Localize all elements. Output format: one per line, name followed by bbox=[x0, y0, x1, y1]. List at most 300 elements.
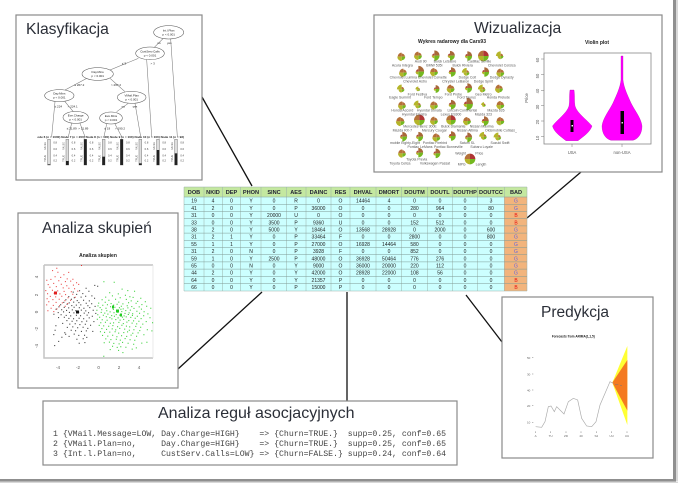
table rows: 108 bbox=[410, 271, 419, 277]
table rows: 0 bbox=[273, 285, 276, 291]
table rows: 0 bbox=[388, 285, 391, 291]
table rows: 2500 bbox=[268, 256, 280, 262]
table rows: 41 bbox=[191, 206, 197, 212]
decision tree: 0.6 bbox=[180, 147, 185, 151]
decision tree: 0.6 bbox=[90, 147, 94, 151]
table header: DOUTHP bbox=[453, 190, 477, 196]
table rows: 3928 bbox=[313, 249, 324, 255]
decision tree: 0.2 bbox=[162, 159, 167, 163]
table rows: 80 bbox=[488, 206, 494, 212]
radar glyph chart: Pontiac LeMans bbox=[407, 145, 433, 149]
panel: Analiza reguł asocjacyjnych bbox=[43, 401, 457, 465]
forecast chart: A bbox=[535, 434, 537, 438]
decision tree: Int.l.Plan bbox=[163, 28, 175, 32]
table rows: 15000 bbox=[312, 285, 326, 291]
table rows: 0 bbox=[362, 249, 365, 255]
radar glyph chart: Chevrolet Astro bbox=[403, 80, 427, 84]
table rows: 0 bbox=[212, 285, 215, 291]
decision tree: CustServ.Calls bbox=[140, 49, 160, 53]
table rows: 66 bbox=[191, 285, 197, 291]
table rows: 16928 bbox=[356, 242, 370, 248]
table rows: F bbox=[339, 235, 342, 241]
scatter plot: 4 bbox=[138, 365, 141, 370]
violin plot: 60 bbox=[535, 57, 540, 62]
table rows: 0 bbox=[464, 199, 467, 205]
forecast chart: ZD bbox=[564, 434, 569, 438]
table rows: G bbox=[514, 271, 518, 277]
radar glyph chart: Hyundai Sonata bbox=[417, 108, 442, 112]
table rows: 0 bbox=[490, 249, 493, 255]
table rows: 0 bbox=[273, 271, 276, 277]
forecast chart: UU bbox=[625, 434, 629, 438]
table rows: G bbox=[514, 235, 518, 241]
table rows: Y bbox=[294, 228, 298, 234]
table rows: B bbox=[514, 220, 518, 226]
table rows: 0 bbox=[230, 264, 233, 270]
table rows: 0 bbox=[439, 249, 442, 255]
table rows: O bbox=[339, 271, 343, 277]
connector: prediction to table bbox=[466, 295, 502, 342]
table rows: 852 bbox=[410, 249, 419, 255]
table rows: 22000 bbox=[382, 271, 396, 277]
table rows: 33 bbox=[191, 220, 197, 226]
table rows: 59 bbox=[191, 256, 197, 262]
decision tree: ≤ 267.2 bbox=[74, 83, 85, 87]
decision tree: 0.4 bbox=[180, 154, 185, 158]
bar labels: TRUE bbox=[99, 155, 102, 162]
radar glyph chart: Mazda RX-7 bbox=[393, 128, 412, 132]
table header: BAD bbox=[510, 190, 522, 196]
decision tree: 0.8 bbox=[53, 140, 58, 144]
table rows: B bbox=[514, 285, 518, 291]
scatter plot: 0 bbox=[97, 365, 100, 370]
radar glyph chart: Buick Riviera bbox=[452, 64, 473, 68]
radar glyph chart: Subaru Loyale bbox=[470, 145, 493, 149]
radar glyph chart: BMW 535i bbox=[426, 64, 443, 68]
table rows: 0 bbox=[362, 220, 365, 226]
decision tree: Eve.Charge bbox=[68, 113, 84, 117]
table rows: 55 bbox=[191, 242, 197, 248]
table rows: 21357 bbox=[312, 278, 326, 284]
table rows: P bbox=[339, 285, 343, 291]
table rows: Y bbox=[294, 271, 298, 277]
decision tree: 0.2 bbox=[72, 159, 76, 163]
heading: Wizualizacja: Wizualizacja bbox=[474, 20, 561, 37]
table rows: 112 bbox=[436, 264, 444, 270]
table rows: O bbox=[339, 242, 343, 248]
radar glyph chart: Nissan Maxima bbox=[470, 124, 494, 128]
table rows: 0 bbox=[212, 213, 215, 219]
forecast chart: 40 bbox=[579, 434, 583, 438]
table rows: 0 bbox=[464, 206, 467, 212]
violin plot: 20 bbox=[535, 119, 540, 124]
table header: NKID bbox=[206, 190, 220, 196]
table rows: 0 bbox=[464, 242, 467, 248]
table rows: R bbox=[294, 199, 298, 205]
table rows: 0 bbox=[490, 220, 493, 226]
table rows: 13568 bbox=[356, 228, 370, 234]
table rows: Y bbox=[249, 235, 253, 241]
table rows: 0 bbox=[464, 249, 467, 255]
table rows: 0 bbox=[439, 285, 442, 291]
table rows: 50464 bbox=[382, 256, 396, 262]
decision tree: 0.4 bbox=[145, 154, 149, 158]
radar glyph chart: Buick Diamante bbox=[441, 124, 466, 128]
bar labels: TRUE bbox=[171, 155, 174, 162]
radar glyph chart: Weight bbox=[455, 152, 466, 156]
panel: Analiza skupień bbox=[18, 213, 178, 388]
decision tree: ≤ 19 bbox=[104, 126, 111, 130]
radar glyph chart: Audi 90 bbox=[415, 60, 427, 64]
decision tree: p < 0.001 bbox=[125, 97, 138, 101]
decision tree: > 190.2 bbox=[115, 126, 125, 130]
radar glyph chart: Price bbox=[475, 152, 483, 156]
decision tree: VMail.Plan bbox=[125, 93, 139, 97]
decision tree: p < 0.001 bbox=[53, 96, 66, 100]
decision tree: ode 6 (n = 1000) Node 7 (n = 200) Node 8 (n = 100) Node 9 (n = 100) Node 10 (n = 100) Node 11 (n = 93) bbox=[37, 135, 184, 139]
table rows: 28928 bbox=[382, 228, 396, 234]
association rules text bbox=[53, 429, 446, 459]
table rows: 2 bbox=[212, 249, 215, 255]
table rows: 0 bbox=[464, 285, 467, 291]
table rows: 280 bbox=[410, 206, 419, 212]
table rows: Y bbox=[249, 206, 253, 212]
table rows: 0 bbox=[388, 249, 391, 255]
panel: Klasyfikacja bbox=[16, 15, 202, 180]
table rows: 1 bbox=[212, 242, 215, 248]
table rows: 0 bbox=[413, 278, 416, 284]
table rows: 1 bbox=[230, 235, 233, 241]
decision tree: 0.8 bbox=[162, 140, 167, 144]
table rows: 0 bbox=[439, 235, 442, 241]
heading: Analiza skupień: Analiza skupień bbox=[42, 220, 152, 237]
table rows: 0 bbox=[490, 271, 493, 277]
bar labels: FALSE bbox=[44, 142, 47, 150]
points: red cluster bbox=[45, 266, 82, 312]
bars bbox=[48, 139, 177, 165]
decision tree: 0.6 bbox=[53, 147, 58, 151]
table rows: G bbox=[514, 264, 518, 270]
points: black cluster bbox=[53, 285, 98, 346]
table header: DOUTL bbox=[430, 190, 450, 196]
table rows: 0 bbox=[230, 206, 233, 212]
bar labels: FALSE bbox=[99, 142, 102, 150]
table rows: 0 bbox=[230, 213, 233, 219]
table rows: 0 bbox=[273, 278, 276, 284]
radar glyph chart: Ford Probe bbox=[445, 92, 462, 96]
decision tree: 0.2 bbox=[90, 159, 94, 163]
table rows: 33464 bbox=[312, 235, 326, 241]
table rows: Y bbox=[294, 278, 298, 284]
decision tree: yes bbox=[167, 41, 172, 45]
forecast chart: UU bbox=[610, 434, 614, 438]
bar labels: TRUE bbox=[153, 155, 156, 162]
table rows: 18464 bbox=[312, 228, 326, 234]
radar glyph chart: Mercury Cougar bbox=[422, 128, 448, 132]
table rows: O bbox=[339, 228, 343, 234]
table rows: 0 bbox=[273, 264, 276, 270]
table rows: O bbox=[339, 213, 343, 219]
table rows: P bbox=[294, 256, 298, 262]
table rows: 220 bbox=[410, 264, 419, 270]
decision tree: > 3 bbox=[151, 61, 155, 65]
table rows: 36000 bbox=[356, 264, 370, 270]
table rows: 776 bbox=[410, 256, 419, 262]
bar labels: TRUE bbox=[44, 155, 47, 162]
radar glyph chart: Chevrolet Corsica bbox=[488, 64, 516, 68]
association rules text: 3 {Int.l.Plan=no, CustServ.Calls=LOW} => {Churn=FALSE.} supp=0.24, conf=0.64 bbox=[53, 449, 446, 459]
radar glyph chart: Saturn SL bbox=[460, 141, 475, 145]
decision tree: p < 0.001 bbox=[91, 74, 104, 78]
table rows: 0 bbox=[464, 220, 467, 226]
table rows: 152 bbox=[410, 220, 419, 226]
scatter title: Analiza skupien bbox=[79, 253, 117, 259]
table rows: 0 bbox=[362, 235, 365, 241]
decision tree: ≤ 224 bbox=[55, 105, 62, 109]
table rows: 0 bbox=[273, 199, 276, 205]
violin plot: 10 bbox=[535, 135, 540, 140]
table rows: Y bbox=[249, 199, 253, 205]
table rows: 9000 bbox=[313, 264, 324, 270]
table rows: Y bbox=[249, 213, 253, 219]
radar glyph chart: mobile Eighty-Eight bbox=[390, 141, 420, 145]
table rows: 36928 bbox=[356, 256, 370, 262]
scatter plot: 0 bbox=[34, 310, 39, 313]
connector: visualization to table bbox=[527, 172, 581, 218]
table header: AES bbox=[290, 190, 302, 196]
forecast chart bbox=[527, 334, 629, 438]
table rows: 0 bbox=[490, 264, 493, 270]
decision tree: 0.2 bbox=[53, 159, 58, 163]
table rows: 65 bbox=[191, 264, 197, 270]
table rows bbox=[191, 199, 518, 291]
table rows: 0 bbox=[230, 271, 233, 277]
table rows: Y bbox=[249, 278, 253, 284]
bar labels bbox=[44, 142, 174, 162]
decision tree: 0.8 bbox=[108, 140, 112, 144]
table rows: 800 bbox=[487, 235, 495, 241]
decision tree: 0.6 bbox=[162, 147, 167, 151]
violin plot: 50 bbox=[535, 73, 540, 78]
bar labels: TRUE bbox=[135, 155, 138, 162]
table rows: 0 bbox=[388, 235, 391, 241]
bar labels: FALSE bbox=[117, 142, 120, 150]
table rows: U bbox=[294, 213, 298, 219]
table rows: G bbox=[514, 228, 518, 234]
decision tree: 0.4 bbox=[126, 154, 130, 158]
scatter plot: -4 bbox=[56, 365, 60, 370]
table header: DOB bbox=[188, 190, 200, 196]
table rows: 580 bbox=[410, 242, 419, 248]
radar glyph chart: Length bbox=[476, 163, 486, 167]
table rows: G bbox=[514, 242, 518, 248]
table rows: 0 bbox=[230, 228, 233, 234]
table rows: 4 bbox=[212, 199, 215, 205]
forecast chart: TU bbox=[549, 434, 553, 438]
decision tree: no bbox=[122, 105, 125, 109]
table header: RES bbox=[335, 190, 347, 196]
violin plot: 40 bbox=[535, 88, 540, 93]
table rows: 0 bbox=[464, 228, 467, 234]
table rows: P bbox=[294, 242, 298, 248]
table rows: 56 bbox=[437, 271, 443, 277]
bar labels: FALSE bbox=[80, 142, 83, 150]
violin: non-USA bbox=[602, 56, 642, 140]
forecast chart: 10 bbox=[527, 421, 531, 425]
table rows: 20000 bbox=[267, 213, 281, 219]
table rows: 0 bbox=[212, 220, 215, 226]
table rows: 42000 bbox=[312, 271, 326, 277]
table rows: 0 bbox=[413, 228, 416, 234]
table rows: 0 bbox=[362, 206, 365, 212]
association rules text: 1 {VMail.Message=LOW, Day.Charge=HIGH} => {Churn=TRUE.} supp=0.25, conf=0.65 bbox=[53, 429, 446, 439]
data table bbox=[184, 187, 527, 291]
radar glyph chart: Mercedes-Benz 300E bbox=[403, 124, 437, 128]
bar labels: TRUE bbox=[80, 155, 83, 162]
radar glyph chart: Mazda 626 bbox=[487, 108, 505, 112]
decision tree: 0.6 bbox=[145, 147, 149, 151]
table rows: 0 bbox=[317, 213, 320, 219]
table rows: 0 bbox=[413, 199, 416, 205]
table rows: 36000 bbox=[312, 206, 326, 212]
radar glyph chart: Hyundai Elantra bbox=[402, 112, 427, 116]
table rows: 0 bbox=[388, 213, 391, 219]
decision tree: > 224.1 bbox=[68, 105, 78, 109]
table rows: O bbox=[339, 256, 343, 262]
table rows: 1 bbox=[230, 242, 233, 248]
forecast chart: 50 bbox=[527, 356, 531, 360]
radar glyph chart: Toyota Previa bbox=[406, 157, 427, 161]
table rows: 28928 bbox=[356, 271, 370, 277]
table rows: O bbox=[339, 206, 343, 212]
table rows: U bbox=[339, 220, 343, 226]
radar glyph chart bbox=[389, 50, 517, 167]
violin plot bbox=[524, 40, 651, 155]
radar glyph chart: Mazda 323 bbox=[475, 112, 492, 116]
radar glyph chart: Chevrolet Corvette bbox=[418, 76, 447, 80]
table header: DMORT bbox=[379, 190, 400, 196]
decision tree: 0.4 bbox=[162, 154, 167, 158]
table rows: G bbox=[514, 199, 518, 205]
points: green cluster bbox=[96, 282, 153, 356]
decision tree: 0.2 bbox=[180, 159, 185, 163]
table rows: P bbox=[294, 235, 298, 241]
table rows: G bbox=[514, 206, 518, 212]
table rows: O bbox=[339, 264, 343, 270]
table rows: 0 bbox=[230, 256, 233, 262]
decision tree: ≤ 21.89 bbox=[67, 126, 77, 130]
table rows: 0 bbox=[413, 213, 416, 219]
violin plot: Violin plot bbox=[585, 40, 609, 46]
table rows: 600 bbox=[487, 228, 495, 234]
table rows: 0 bbox=[464, 271, 467, 277]
decision tree: 0.8 bbox=[180, 140, 185, 144]
decision tree: p < 0.001 bbox=[144, 53, 157, 57]
decision tree: 0.8 bbox=[72, 140, 76, 144]
table rows: 0 bbox=[439, 199, 442, 205]
decision tree: Eve.Mins bbox=[105, 114, 118, 118]
radar glyph chart: MPG bbox=[458, 163, 466, 167]
decision tree: 0.6 bbox=[126, 147, 130, 151]
table rows: B bbox=[514, 278, 518, 284]
radar glyph chart: Toyota Celica bbox=[390, 161, 411, 165]
table rows: 31 bbox=[191, 249, 197, 255]
decision tree: Day.Mins bbox=[92, 70, 104, 74]
decision tree: 0.4 bbox=[72, 154, 76, 158]
table rows: 0 bbox=[464, 256, 467, 262]
table rows: 0 bbox=[388, 220, 391, 226]
table rows: 0 bbox=[230, 278, 233, 284]
violin plot: Price bbox=[524, 93, 529, 103]
table rows: 14464 bbox=[382, 242, 396, 248]
bar labels: FALSE bbox=[62, 142, 65, 150]
decision tree: > 267.2 bbox=[111, 83, 121, 87]
scatter plot bbox=[34, 265, 153, 370]
heading: Analiza reguł asocjacyjnych: Analiza reguł asocjacyjnych bbox=[158, 405, 355, 422]
table rows: P bbox=[339, 278, 343, 284]
radar glyph chart: Lexus ES300 bbox=[441, 112, 461, 116]
decision tree: no bbox=[157, 41, 161, 45]
table rows: 27000 bbox=[312, 242, 326, 248]
radar glyph chart: Honda Accord bbox=[391, 108, 413, 112]
decision tree: 0.2 bbox=[108, 159, 112, 163]
table rows: 0 bbox=[212, 278, 215, 284]
radar glyph chart: Dodge Dynasty bbox=[490, 76, 514, 80]
connector: classification to table bbox=[202, 97, 252, 186]
forecast chart: 40 bbox=[527, 388, 531, 392]
radar glyph chart: Honda Prelude bbox=[487, 96, 510, 100]
decision tree: 0.4 bbox=[108, 154, 112, 158]
decision tree: yes bbox=[133, 105, 138, 109]
radar glyph chart: Ford Taurus bbox=[457, 96, 476, 100]
table rows: 0 bbox=[464, 213, 467, 219]
decision tree: 0.8 bbox=[145, 140, 149, 144]
table rows: Y bbox=[249, 285, 253, 291]
table rows: 0 bbox=[490, 278, 493, 284]
violin: USA bbox=[552, 90, 592, 141]
table rows: N bbox=[249, 264, 253, 270]
radar glyph chart: Ford Festiva bbox=[408, 92, 427, 96]
decision tree: 0.6 bbox=[108, 147, 112, 151]
decision tree: 0.2 bbox=[145, 159, 149, 163]
table rows: F bbox=[339, 249, 342, 255]
table rows: G bbox=[514, 256, 518, 262]
decision tree: 0.2 bbox=[126, 159, 130, 163]
radar glyph chart: Suzuki Swift bbox=[491, 141, 510, 145]
table rows: 0 bbox=[317, 199, 320, 205]
table header: DEP bbox=[226, 190, 238, 196]
decision tree: 0.4 bbox=[53, 154, 58, 158]
table rows: 0 bbox=[212, 264, 215, 270]
table rows: 2 bbox=[212, 271, 215, 277]
forecast chart: S2 bbox=[595, 434, 598, 438]
radar glyph chart: Eagle Summit bbox=[389, 96, 411, 100]
table header: PHON bbox=[243, 190, 259, 196]
table rows: 0 bbox=[273, 206, 276, 212]
table rows: 14464 bbox=[356, 199, 370, 205]
table rows: Y bbox=[294, 264, 298, 270]
bar labels: TRUE bbox=[117, 155, 120, 162]
table rows: 2 bbox=[212, 206, 215, 212]
table rows: 0 bbox=[362, 278, 365, 284]
table rows: 5000 bbox=[268, 228, 280, 234]
table rows: 3 bbox=[490, 199, 493, 205]
radar glyph chart: Geo Metro bbox=[475, 92, 492, 96]
radar glyph chart: Acura Integra bbox=[392, 64, 413, 68]
scatter plot: 2 bbox=[118, 365, 121, 370]
table rows: 31 bbox=[191, 235, 197, 241]
table rows: 0 bbox=[490, 242, 493, 248]
